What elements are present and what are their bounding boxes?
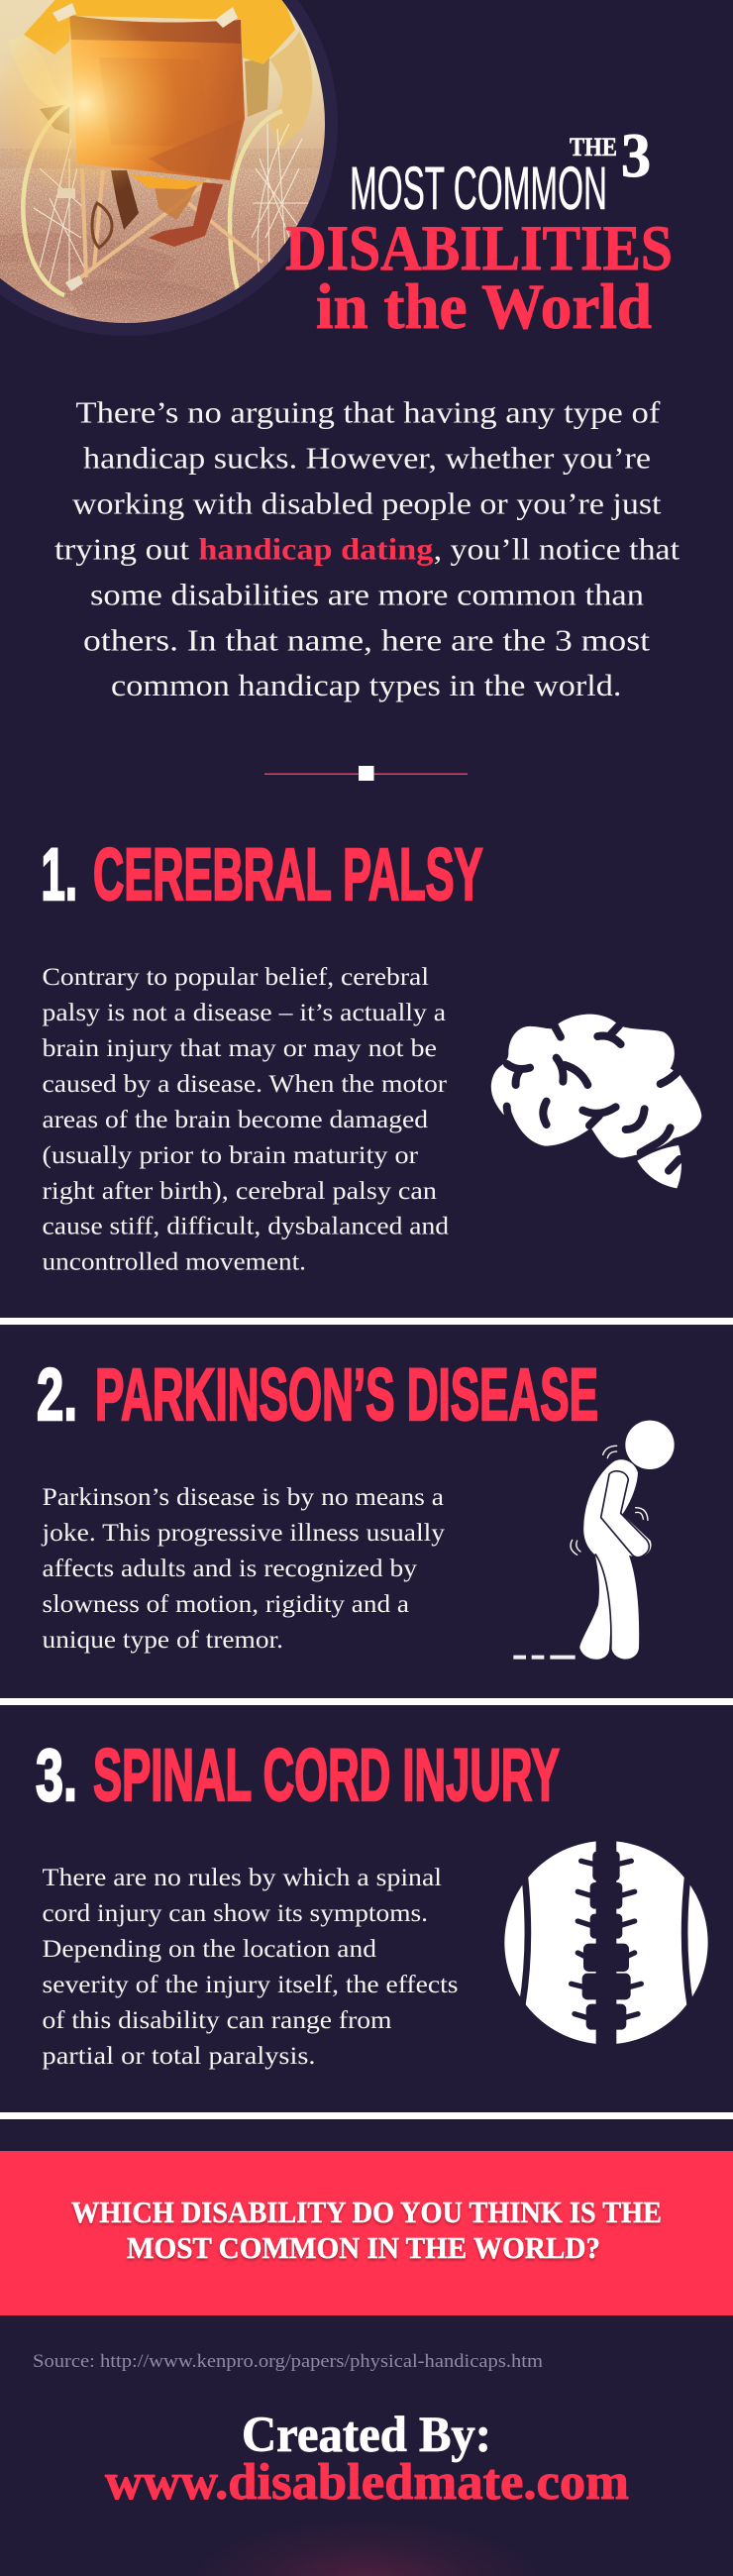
text block: spinal cord injury: Depending on the location and — [42, 1936, 377, 1963]
panel: cerebral palsy — [42, 833, 701, 1276]
intro paragraph: some disabilities are more common than — [90, 577, 645, 611]
text block: spinal cord injury: partial or total paralysis. — [42, 2043, 315, 2070]
icon: brain — [491, 1015, 701, 1188]
intro paragraph: trying out — [54, 531, 189, 566]
intro paragraph: others. In that name, here are the 3 most — [83, 622, 650, 657]
title — [285, 120, 673, 343]
heading: spinal cord injury — [36, 1734, 560, 1816]
credits — [105, 2408, 629, 2511]
icon: stooped person with tremor — [513, 1421, 675, 1660]
panel: spinal cord injury — [36, 1734, 708, 2070]
white separator 1 — [0, 1318, 733, 1325]
heading: cerebral palsy — [42, 833, 483, 915]
heading: spinal cord injury: 3. — [36, 1734, 77, 1816]
text block: cerebral palsy: uncontrolled movement. — [42, 1249, 306, 1276]
intro paragraph: handicap sucks. However, whether you’re — [83, 441, 651, 476]
text block: spinal cord injury: There are no rules by which a spinal — [42, 1865, 442, 1891]
callout: question band: MOST COMMON IN THE WORLD? — [127, 2230, 600, 2265]
text block: parkinson's disease: unique type of tremor. — [42, 1627, 283, 1654]
intro paragraph: handicap dating — [198, 531, 434, 566]
icon: spine — [504, 1836, 708, 2048]
intro paragraph: There’s no arguing that having any type of — [75, 395, 661, 430]
text block: spinal cord injury — [42, 1865, 458, 2070]
white separator 3 — [0, 2112, 733, 2119]
text block: spinal cord injury: cord injury can show its symptoms. — [42, 1900, 428, 1927]
credits: Created By: — [242, 2408, 491, 2463]
heading: parkinson's disease: 2. — [37, 1353, 77, 1436]
credits: www.disabledmate.com — [105, 2454, 629, 2511]
white separator 2 — [0, 1698, 733, 1705]
text block: cerebral palsy — [42, 964, 450, 1276]
panel: parkinson's disease — [37, 1353, 675, 1660]
text block: spinal cord injury: severity of the injury itself, the effects — [42, 1972, 458, 1998]
text block: parkinson's disease: joke. This progressive illness usually — [41, 1520, 446, 1547]
text block: cerebral palsy: cause stiff, difficult, dysbalanced and — [42, 1214, 450, 1240]
title: in the World — [316, 271, 652, 343]
text block: cerebral palsy: right after birth), cerebral palsy can — [42, 1178, 438, 1205]
photo: wheelchair in circle — [0, 0, 338, 336]
text block: cerebral palsy: Contrary to popular belief, cerebral — [42, 964, 429, 991]
text block: cerebral palsy: brain injury that may or may not be — [42, 1035, 437, 1062]
title: THE — [570, 133, 617, 161]
intro paragraph: , you’ll notice that — [434, 531, 680, 566]
intro paragraph: working with disabled people or you’re just — [72, 485, 662, 520]
text block: spinal cord injury: of this disability can range from — [42, 2007, 392, 2034]
text block: parkinson's disease: Parkinson’s disease is by no means a — [42, 1484, 444, 1511]
title: DISABILITIES — [285, 213, 673, 284]
intro paragraph — [54, 395, 680, 702]
source note: Source: http://www.kenpro.org/papers/physical-handicaps.htm — [33, 2351, 543, 2372]
text block: cerebral palsy: caused by a disease. When the motor — [42, 1071, 448, 1098]
title: 3 — [621, 120, 651, 190]
text block: parkinson's disease — [41, 1484, 446, 1654]
text block: cerebral palsy: areas of the brain become damaged — [42, 1107, 429, 1133]
callout: question band — [0, 2151, 733, 2315]
text block: parkinson's disease: affects adults and is recognized by — [42, 1556, 418, 1582]
callout: question band: WHICH DISABILITY DO YOU THINK IS THE — [71, 2195, 662, 2229]
text block: cerebral palsy: (usually prior to brain maturity or — [42, 1142, 419, 1169]
intro paragraph: common handicap types in the world. — [111, 668, 622, 702]
heading: cerebral palsy: 1. — [42, 833, 77, 915]
text block: cerebral palsy: palsy is not a disease – it’s actually a — [42, 1000, 446, 1026]
divider — [264, 766, 468, 781]
text block: parkinson's disease: slowness of motion, rigidity and a — [42, 1591, 409, 1618]
